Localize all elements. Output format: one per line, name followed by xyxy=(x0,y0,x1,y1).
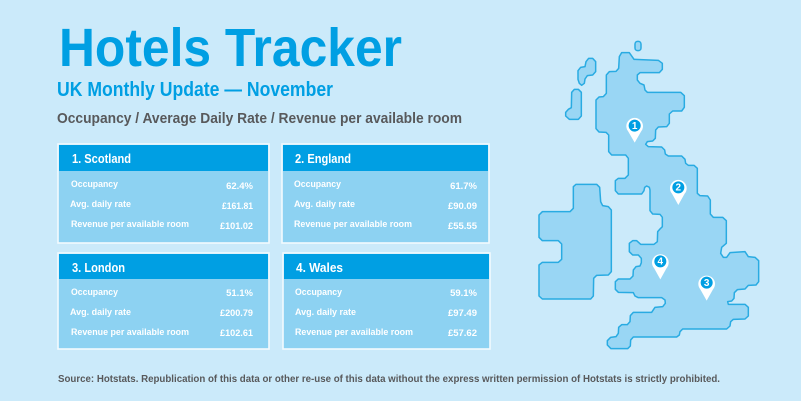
panel: England: £90.09 xyxy=(448,201,477,212)
panel: Wales: Avg. daily rate xyxy=(295,307,356,318)
panel: England: Revenue per available room xyxy=(294,219,412,230)
panel: England: Avg. daily rate xyxy=(294,199,355,210)
icon: pin 3: 3 xyxy=(704,278,710,289)
panel: London: 3. London xyxy=(72,261,125,275)
panel: London: 51.1% xyxy=(226,288,254,299)
panel: Scotland: 62.4% xyxy=(226,181,254,192)
panel: Wales: Occupancy xyxy=(295,287,343,298)
map: Ireland xyxy=(539,184,611,299)
panel: London: Occupancy xyxy=(71,287,119,298)
panel: England: 61.7% xyxy=(450,181,478,192)
panel: Wales: 59.1% xyxy=(450,288,478,299)
icon: pin 4: 4 xyxy=(658,257,664,268)
icon: pin 1 xyxy=(626,118,643,143)
subtitle: UK Monthly Update — November xyxy=(57,79,333,101)
panel: Wales: Revenue per available room xyxy=(295,327,413,338)
panel: Scotland: 1. Scotland xyxy=(72,152,131,166)
panel: Scotland: Occupancy xyxy=(71,179,119,190)
panel: London: £200.79 xyxy=(220,308,253,319)
map: Outer Hebrides north xyxy=(578,58,596,85)
panel: Wales xyxy=(283,253,490,349)
source note: Source: Hotstats. Republication of this data or other re-use of this data without the express written permission of Hotstats is strictly prohibited. xyxy=(58,373,720,385)
icon: pin 3 xyxy=(698,276,715,301)
panel: England xyxy=(282,144,489,243)
panel: England: 2. England xyxy=(295,152,351,166)
map: Outer Hebrides south xyxy=(566,89,581,119)
panel: Scotland: £161.81 xyxy=(222,201,254,212)
icon: pin 2: 2 xyxy=(676,183,682,194)
panel: London: Avg. daily rate xyxy=(70,307,131,318)
panel: Wales: 4. Wales xyxy=(296,261,343,275)
icon: pin 2 xyxy=(670,180,687,205)
panel: Scotland: £101.02 xyxy=(220,221,253,232)
icon: pin 4 xyxy=(652,254,669,279)
panel: Wales: £57.62 xyxy=(448,328,477,339)
panel: Scotland: Revenue per available room xyxy=(71,219,189,230)
panel: Wales: £97.49 xyxy=(448,308,477,319)
panel: London xyxy=(58,253,269,349)
map: Great Britain xyxy=(596,53,759,349)
panel: London: £102.61 xyxy=(220,328,254,339)
icon: pin 1: 1 xyxy=(632,121,638,132)
map of UK xyxy=(539,41,759,349)
panel: London: Revenue per available room xyxy=(71,327,189,338)
panel: Scotland xyxy=(58,144,269,243)
panel: Scotland: Avg. daily rate xyxy=(70,199,131,210)
panel: England: Occupancy xyxy=(294,179,342,190)
panel: England: £55.55 xyxy=(448,221,478,232)
title: Hotels Tracker xyxy=(59,18,402,78)
metrics line: Occupancy / Average Daily Rate / Revenue per available room xyxy=(57,110,462,127)
map: Shetland xyxy=(635,41,641,51)
